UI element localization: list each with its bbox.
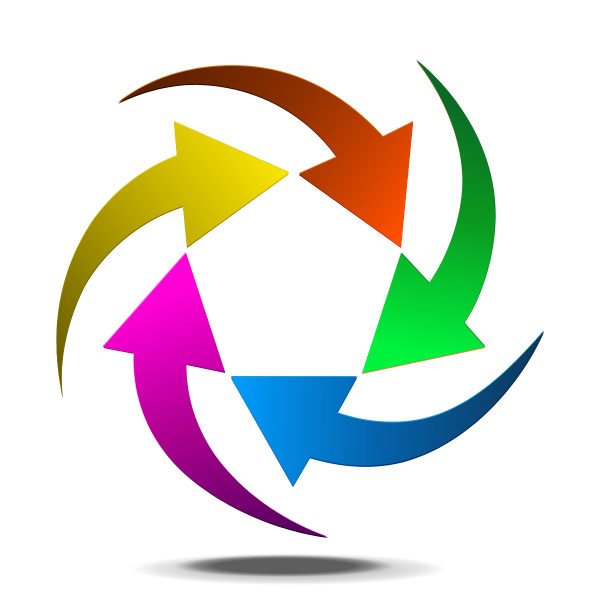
arrow: magenta <box>102 252 328 538</box>
arrow: green <box>362 60 496 374</box>
arrow: yellow <box>56 121 289 399</box>
arrow: blue <box>231 330 544 487</box>
arrow: red-orange <box>118 65 413 248</box>
ground shadow <box>131 553 447 585</box>
